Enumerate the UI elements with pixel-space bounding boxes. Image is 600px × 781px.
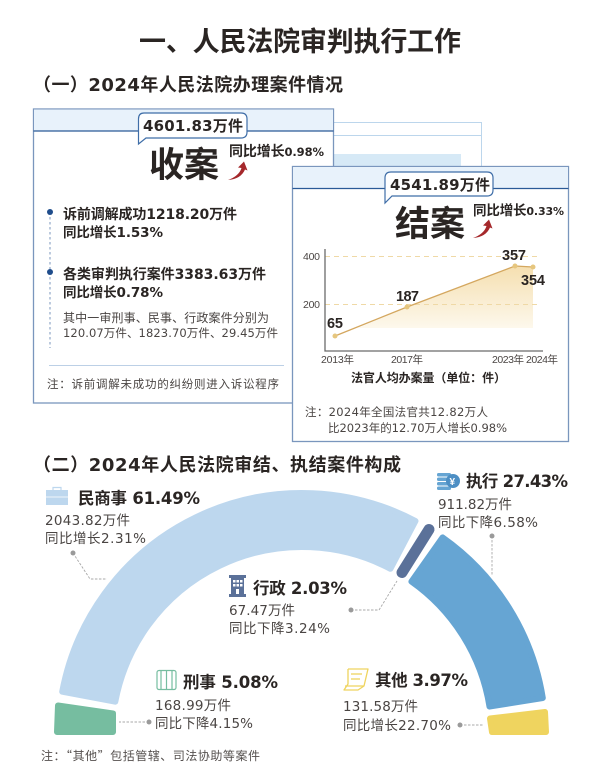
panel: cases concluded bbox=[292, 166, 568, 442]
icon: prison bars bbox=[157, 670, 176, 690]
icon: coins bbox=[437, 473, 460, 490]
line chart: cases per judge: 400 bbox=[303, 251, 320, 263]
text: pre-litigation mediation: 诉前调解成功1218.20万件 bbox=[63, 206, 237, 223]
heading: section one: （一）2024年人民法院办理案件情况 bbox=[33, 74, 343, 96]
line chart: cases per judge: 65 bbox=[327, 316, 343, 332]
icon: briefcase bbox=[46, 488, 68, 505]
label: criminal bbox=[155, 673, 278, 732]
label: administrative: 行政 2.03% bbox=[253, 579, 347, 598]
segment: civil and commercial bbox=[62, 493, 415, 702]
title: 一、人民法院审判执行工作 bbox=[139, 20, 461, 59]
label: administrative: 同比下降3.24% bbox=[229, 621, 330, 637]
line chart: cases per judge bbox=[303, 248, 558, 386]
label: administrative bbox=[229, 579, 347, 637]
line chart: cases per judge: 2023年 bbox=[492, 353, 524, 366]
icon: coins: ¥ bbox=[450, 477, 456, 488]
icon: document bbox=[344, 669, 368, 690]
leader lines bbox=[73, 536, 492, 725]
label: civil and commercial: 2043.82万件 bbox=[45, 513, 130, 529]
label: enforcement: 执行 27.43% bbox=[466, 472, 568, 491]
callout: received total bbox=[138, 113, 247, 144]
label: civil and commercial bbox=[45, 489, 200, 547]
text: trial and enforcement: 各类审判执行案件3383.63万件 bbox=[63, 266, 266, 283]
label: criminal: 同比下降4.15% bbox=[155, 716, 253, 732]
label: other: 其他 3.97% bbox=[375, 671, 468, 690]
line chart: cases per judge: 2013年 bbox=[321, 353, 354, 366]
heading: 收案: 收案 bbox=[149, 137, 219, 188]
label: civil and commercial: 同比增长2.31% bbox=[45, 531, 146, 547]
text: trial and enforcement: 同比增长0.78% bbox=[63, 284, 163, 301]
heading: 结案: 结案 bbox=[395, 196, 465, 247]
text: pre-litigation mediation bbox=[63, 206, 237, 241]
line chart: cases per judge: 354 bbox=[521, 273, 545, 289]
note: 注：诉前调解未成功的纠纷则进入诉讼程序 bbox=[47, 376, 279, 392]
growth label: 同比增长0.98% bbox=[229, 143, 324, 160]
line chart: cases per judge: 200 bbox=[303, 299, 320, 311]
line chart: cases per judge: 2017年 bbox=[391, 353, 423, 366]
label: other: 同比增长22.70% bbox=[343, 718, 451, 734]
line chart: cases per judge: 2024年 bbox=[526, 353, 558, 366]
decorative back panel bbox=[320, 122, 482, 182]
icon: growth arrow bbox=[228, 162, 248, 180]
text: pre-litigation mediation: 同比增长1.53% bbox=[63, 224, 163, 241]
growth label: 同比增长0.33% bbox=[473, 202, 564, 219]
label: enforcement: 911.82万件 bbox=[438, 497, 512, 513]
label: criminal: 刑事 5.08% bbox=[183, 673, 278, 692]
label: enforcement: 同比下降6.58% bbox=[438, 515, 538, 531]
label: enforcement bbox=[438, 472, 568, 531]
segment: enforcement bbox=[411, 537, 543, 707]
leader dots bbox=[70, 534, 494, 728]
footnote: 注：“其他”包括管辖、司法协助等案件 bbox=[41, 747, 260, 764]
note bbox=[305, 405, 507, 435]
panel: cases received bbox=[34, 109, 334, 403]
icon: growth arrow bbox=[473, 220, 492, 238]
line chart: cases per judge: 法官人均办案量（单位：件） bbox=[351, 369, 506, 386]
label: civil and commercial: 民商事 61.49% bbox=[78, 489, 200, 508]
timeline bbox=[47, 209, 53, 348]
callout: concluded total bbox=[385, 172, 493, 203]
chart: case composition arc bbox=[57, 493, 546, 732]
callout: received total: 4601.83万件 bbox=[143, 117, 243, 135]
text: first-instance breakdown: 其中一审刑事、民事、行政案件分别为 bbox=[63, 310, 269, 325]
segment: criminal bbox=[57, 706, 113, 732]
line chart: cases per judge: 357 bbox=[502, 248, 526, 264]
text: first-instance breakdown: 120.07万件、1823.70万件、29.45万件 bbox=[63, 326, 278, 340]
label: criminal: 168.99万件 bbox=[155, 698, 231, 714]
icon: building bbox=[229, 575, 246, 597]
segment: other bbox=[490, 712, 546, 732]
line chart: cases per judge: 187 bbox=[396, 289, 419, 305]
note: 比2023年的12.70万人增长0.98% bbox=[328, 421, 507, 435]
label: administrative: 67.47万件 bbox=[229, 603, 295, 619]
callout: concluded total: 4541.89万件 bbox=[390, 176, 490, 194]
text: trial and enforcement bbox=[63, 266, 266, 301]
text: first-instance breakdown bbox=[63, 310, 278, 340]
segment: administrative bbox=[402, 530, 429, 572]
note: 注：2024年全国法官共12.82万人 bbox=[305, 405, 488, 419]
label: other bbox=[343, 671, 468, 734]
heading: section two: （二）2024年人民法院审结、执结案件构成 bbox=[33, 454, 401, 476]
label: other: 131.58万件 bbox=[343, 699, 418, 715]
